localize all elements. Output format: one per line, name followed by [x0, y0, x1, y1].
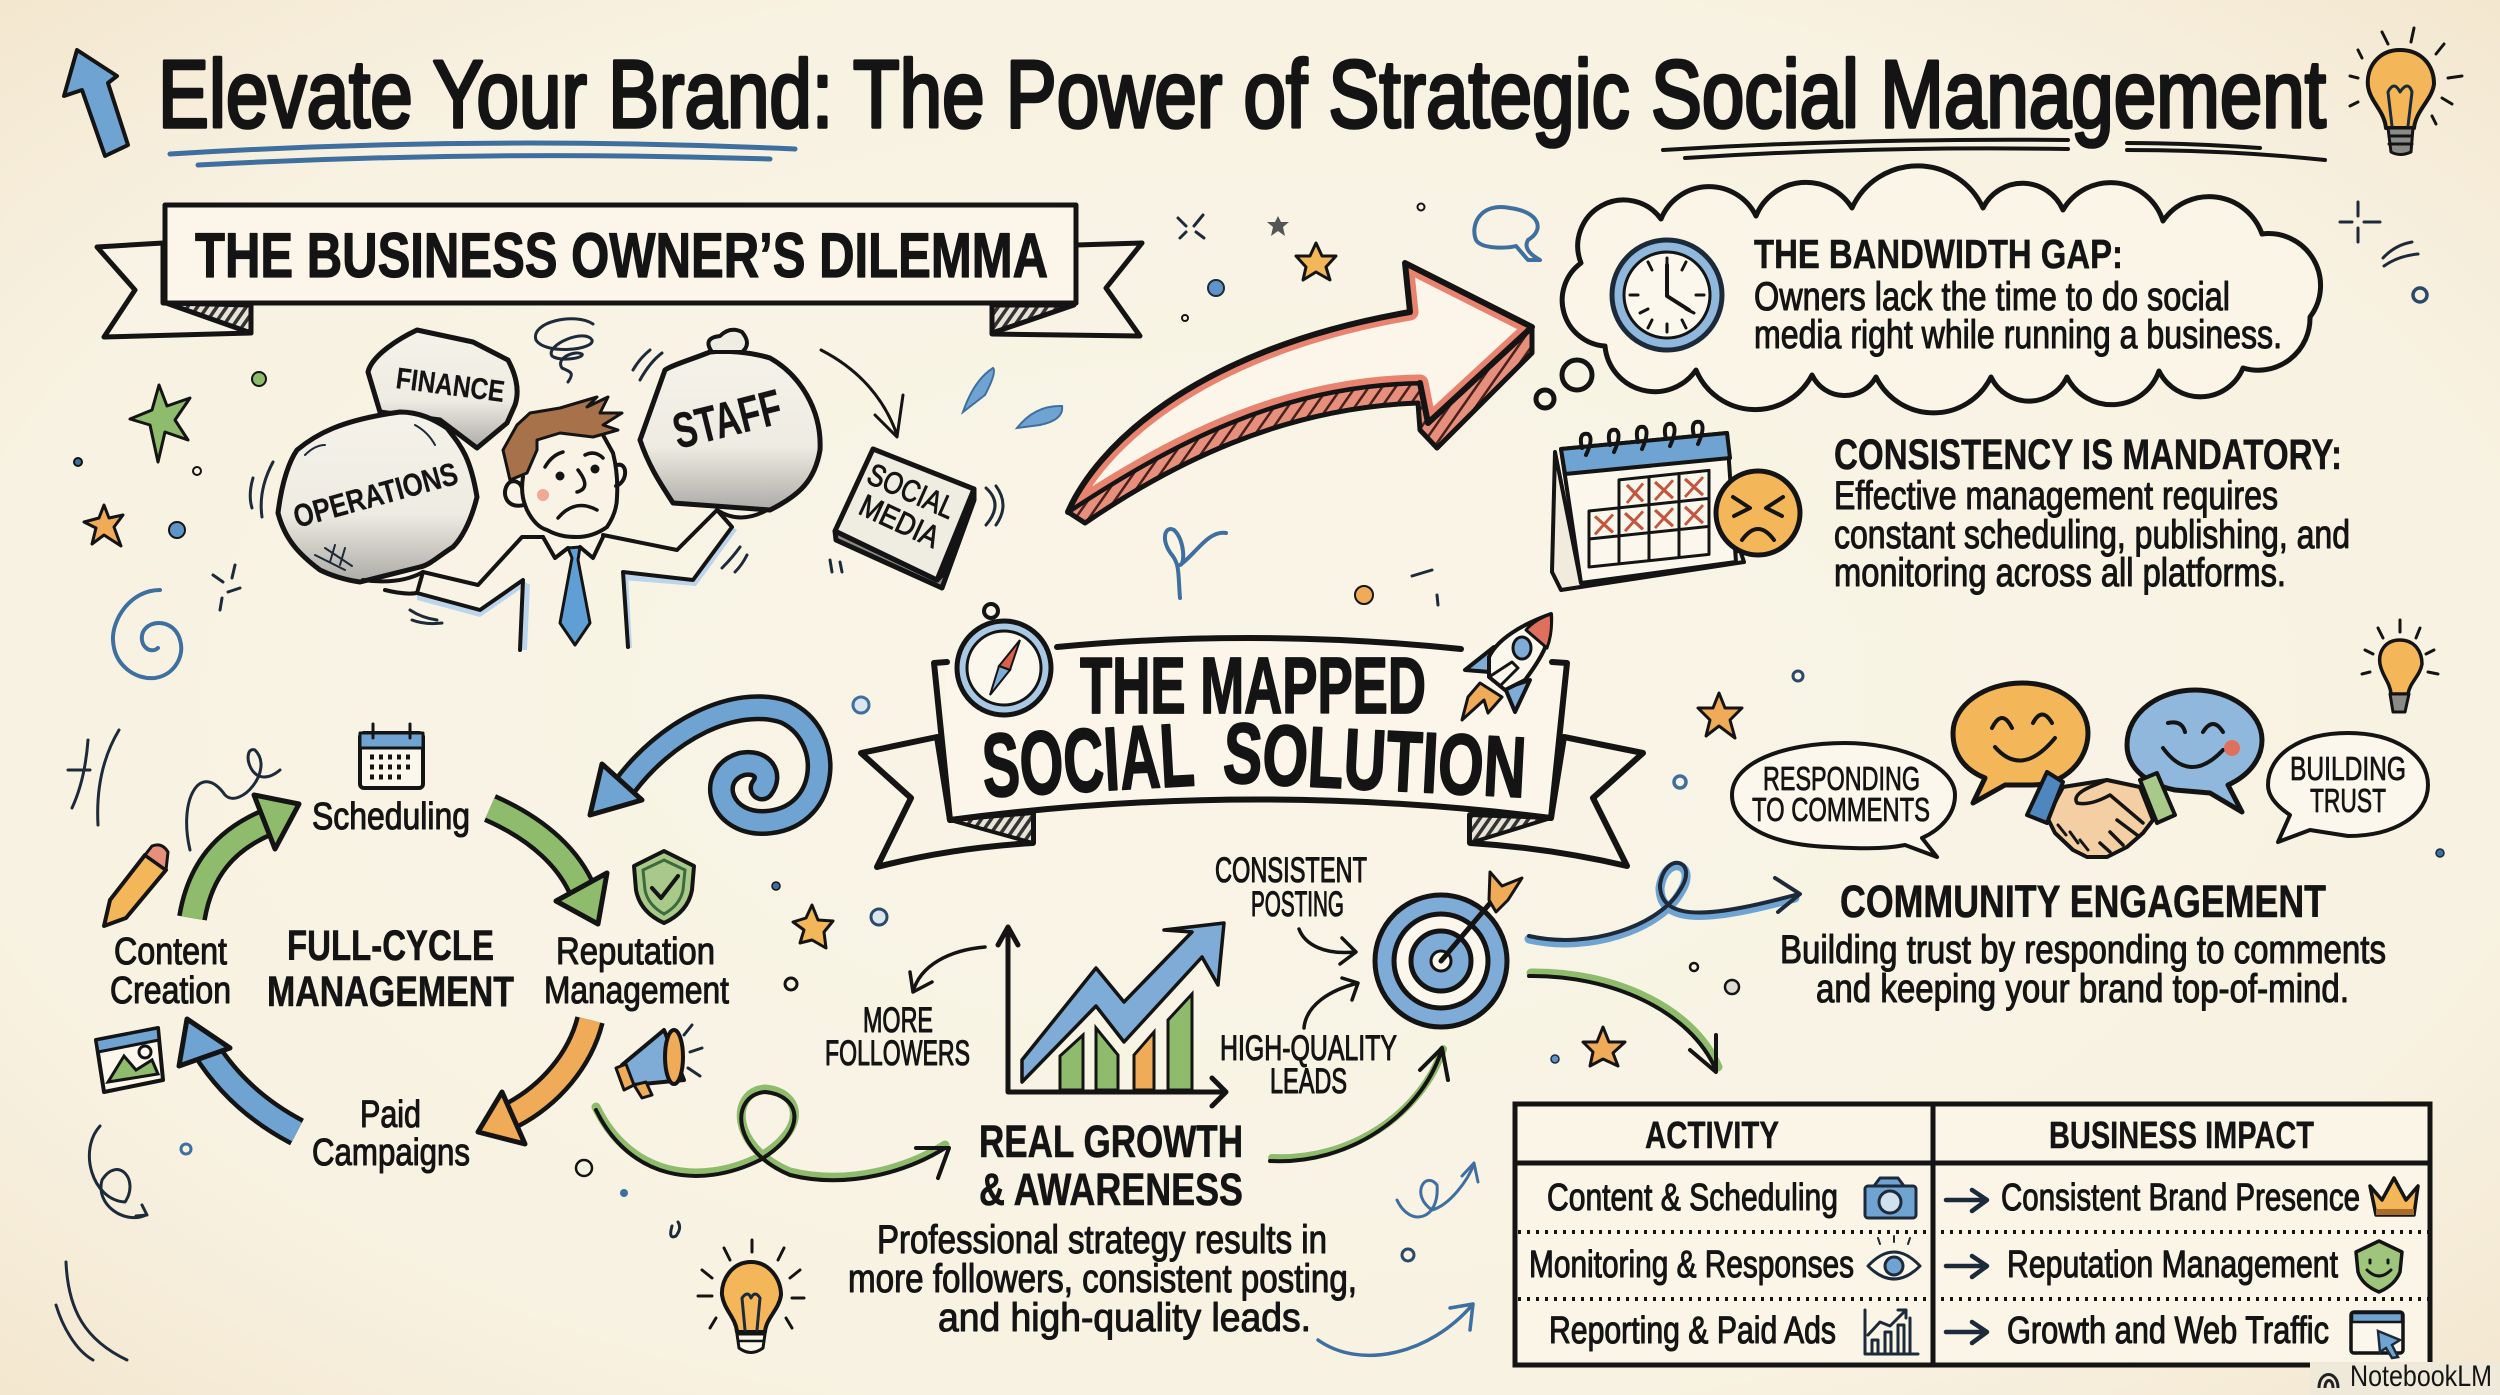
icon: clock — [1612, 240, 1722, 350]
heading: real growth: REAL GROWTH — [979, 1116, 1243, 1167]
heading text: THE MAPPED — [1080, 641, 1426, 730]
box: social media: MEDIA — [854, 488, 945, 555]
text: the bandwidth gap — [1754, 231, 2282, 357]
box: social media — [835, 449, 974, 588]
text: real growth description: more followers, consistent posting, — [848, 1257, 1357, 1301]
decoration: stars and dots top — [74, 202, 2427, 678]
icon: handshake — [2027, 772, 2175, 857]
icon: browser cursor — [2351, 1312, 2403, 1358]
table: activity and business impact — [1515, 1104, 2430, 1365]
thought cloud — [1562, 166, 2321, 413]
icon: compass — [957, 604, 1051, 715]
label: reputation management: Reputation — [556, 931, 715, 973]
table impact column — [2001, 1177, 2360, 1352]
rock: finance: FINANCE — [394, 362, 506, 409]
text: consistency is mandatory — [1834, 431, 2350, 595]
icon: orange smiling bubble — [1953, 683, 2088, 803]
stress swirl — [535, 319, 593, 382]
icon: up arrow — [64, 50, 128, 156]
banner heading: THE BUSINESS OWNER’S DILEMMA — [195, 221, 1048, 291]
speech bubble: responding to comments: RESPONDING — [1763, 760, 1920, 797]
arrow: green to reputation — [490, 808, 607, 924]
icon: shield — [634, 851, 694, 923]
speech bubble: building trust: TRUST — [2310, 782, 2386, 819]
label: high-quality leads — [1220, 1029, 1397, 1101]
table activity column: Content & Scheduling — [1547, 1177, 1838, 1219]
arrow: blue to content creation — [179, 1019, 297, 1132]
cycle: full-cycle management — [96, 724, 729, 1174]
orange star and ring — [1551, 671, 2444, 1066]
icon: megaphone — [616, 1025, 702, 1098]
table headers — [1645, 1115, 2314, 1157]
tie — [560, 547, 590, 645]
icon: rocket — [1462, 614, 1552, 720]
rock: operations — [278, 412, 477, 582]
heading text — [980, 641, 1529, 817]
arrow: orange to paid campaigns — [478, 1020, 590, 1144]
label: content creation: Content — [114, 931, 227, 973]
icon: crown — [2370, 1178, 2418, 1215]
rock: staff: STAFF — [667, 379, 787, 460]
label: consistent posting: POSTING — [1251, 885, 1344, 924]
heading: real growth: & AWARENESS — [979, 1164, 1243, 1215]
label: consistent posting: CONSISTENT — [1215, 851, 1367, 890]
icon: smiling shield — [2356, 1241, 2402, 1292]
table headers: BUSINESS IMPACT — [2049, 1115, 2314, 1157]
center label: full-cycle management: FULL-CYCLE — [287, 922, 494, 970]
decoration: squiggles left — [56, 697, 887, 1360]
icon: calendar with crosses — [1552, 422, 1800, 590]
table impact column: Reputation Management — [2007, 1244, 2338, 1286]
label: content creation: Creation — [110, 970, 231, 1012]
icon: eye — [1868, 1236, 1920, 1279]
heading text: SOLUTION — [1221, 705, 1529, 816]
blue underline — [170, 143, 795, 165]
table headers: ACTIVITY — [1645, 1115, 1779, 1157]
label: high-quality leads: HIGH-QUALITY — [1220, 1029, 1397, 1068]
heading text: SOCIAL — [980, 705, 1197, 817]
arrow: blue loop — [1529, 863, 1800, 943]
table activity column — [1529, 1177, 1854, 1352]
black underline — [1663, 140, 2325, 160]
banner heading — [97, 205, 1142, 337]
text: consistency is mandatory: monitoring across all platforms. — [1834, 551, 2286, 595]
label: high-quality leads: LEADS — [1270, 1062, 1347, 1101]
arrow: large red arrow — [1068, 263, 1532, 523]
icon: light bulb — [2350, 28, 2462, 154]
water drops — [963, 368, 1062, 428]
table impact column: Growth and Web Traffic — [2007, 1310, 2329, 1352]
label: paid campaigns — [312, 1094, 470, 1174]
speech bubble: building trust: BUILDING — [2290, 750, 2406, 787]
arrow: green to scheduling — [192, 795, 299, 918]
icon: target with dart — [1375, 872, 1522, 1027]
label: consistent posting — [1215, 851, 1367, 924]
arrow: green to target — [1270, 1048, 1448, 1161]
arrow: green to table — [1529, 973, 1718, 1072]
label: more followers — [825, 1001, 970, 1073]
text: the bandwidth gap: THE BANDWIDTH GAP: — [1754, 231, 2123, 277]
text: real growth description — [848, 1218, 1357, 1340]
icon: blue smiling bubble — [2127, 690, 2262, 812]
label: paid campaigns: Paid — [360, 1094, 421, 1136]
icon: camera — [1865, 1178, 1916, 1218]
table impact column: Consistent Brand Presence — [2001, 1177, 2360, 1219]
icon: image window — [96, 1028, 163, 1092]
decoration: blue squiggle and arrow bottom — [1318, 1163, 1478, 1355]
text: real growth description: and high-quality leads. — [938, 1296, 1311, 1340]
text: community description — [1780, 928, 2386, 1011]
center label: full-cycle management: MANAGEMENT — [267, 968, 514, 1016]
label: reputation management — [544, 931, 729, 1012]
text: the bandwidth gap: Owners lack the time to do social — [1754, 275, 2230, 319]
heading: real growth — [979, 1116, 1243, 1215]
text: the bandwidth gap: media right while running a business. — [1754, 313, 2282, 357]
callout: the bandwidth gap — [1536, 166, 2321, 413]
sleeve and torso shading — [417, 527, 737, 650]
label: more followers: MORE — [863, 1001, 933, 1040]
head — [522, 435, 617, 537]
panel: the business owner's dilemma — [97, 205, 1142, 650]
text: real growth description: Professional strategy results in — [877, 1218, 1327, 1262]
box: social media: SOCIAL — [862, 456, 960, 526]
motion marks — [250, 350, 1003, 624]
label: content creation — [110, 931, 231, 1012]
speech bubble: responding to comments: TO COMMENTS — [1752, 791, 1930, 828]
arrow: green loop — [596, 1089, 949, 1180]
title — [64, 28, 2462, 165]
section: real growth and awareness — [698, 851, 1522, 1352]
small arrows to target — [1299, 929, 1358, 1028]
icon: small light bulb — [2362, 620, 2438, 712]
speech bubble: responding to comments — [1732, 743, 1955, 857]
growth chart — [998, 923, 1226, 1106]
falling arrow to social media — [821, 350, 903, 437]
center label: full-cycle management — [267, 922, 514, 1016]
text: consistency is mandatory: CONSISTENCY IS MANDATORY: — [1834, 431, 2342, 479]
heading: community engagement: COMMUNITY ENGAGEMENT — [1840, 876, 2326, 927]
callout: consistency is mandatory — [1552, 422, 2350, 595]
rock: finance — [368, 330, 517, 448]
text: community description: and keeping your brand top-of-mind. — [1816, 967, 2349, 1011]
text: community description: Building trust by responding to comments — [1780, 928, 2386, 972]
figure: stressed business owner — [363, 397, 767, 650]
text: consistency is mandatory: constant scheduling, publishing, and — [1834, 513, 2350, 557]
icon: bar growth — [1865, 1310, 1918, 1354]
arrow: to more followers — [910, 947, 985, 992]
label: more followers: FOLLOWERS — [825, 1034, 970, 1073]
table activity column: Monitoring & Responses — [1529, 1244, 1854, 1286]
text: consistency is mandatory: Effective management requires — [1834, 474, 2278, 518]
speech bubble: building trust — [2268, 733, 2428, 842]
icon: light bulb bottom — [698, 1240, 804, 1352]
label: scheduling: Scheduling — [312, 796, 470, 838]
hair — [503, 397, 622, 480]
rock: staff — [640, 330, 820, 510]
section: community engagement — [1529, 620, 2444, 1072]
icon: calendar small — [360, 724, 423, 788]
table activity column: Reporting & Paid Ads — [1549, 1310, 1836, 1352]
label: reputation management: Management — [544, 970, 729, 1012]
label: paid campaigns: Campaigns — [312, 1132, 470, 1174]
icon: pencil — [104, 845, 168, 926]
arrow: blue swirl — [590, 708, 819, 822]
rock: operations: OPERATIONS — [289, 455, 462, 535]
table arrows — [1946, 1190, 1987, 1343]
banner: the mapped social solution — [861, 604, 1643, 867]
